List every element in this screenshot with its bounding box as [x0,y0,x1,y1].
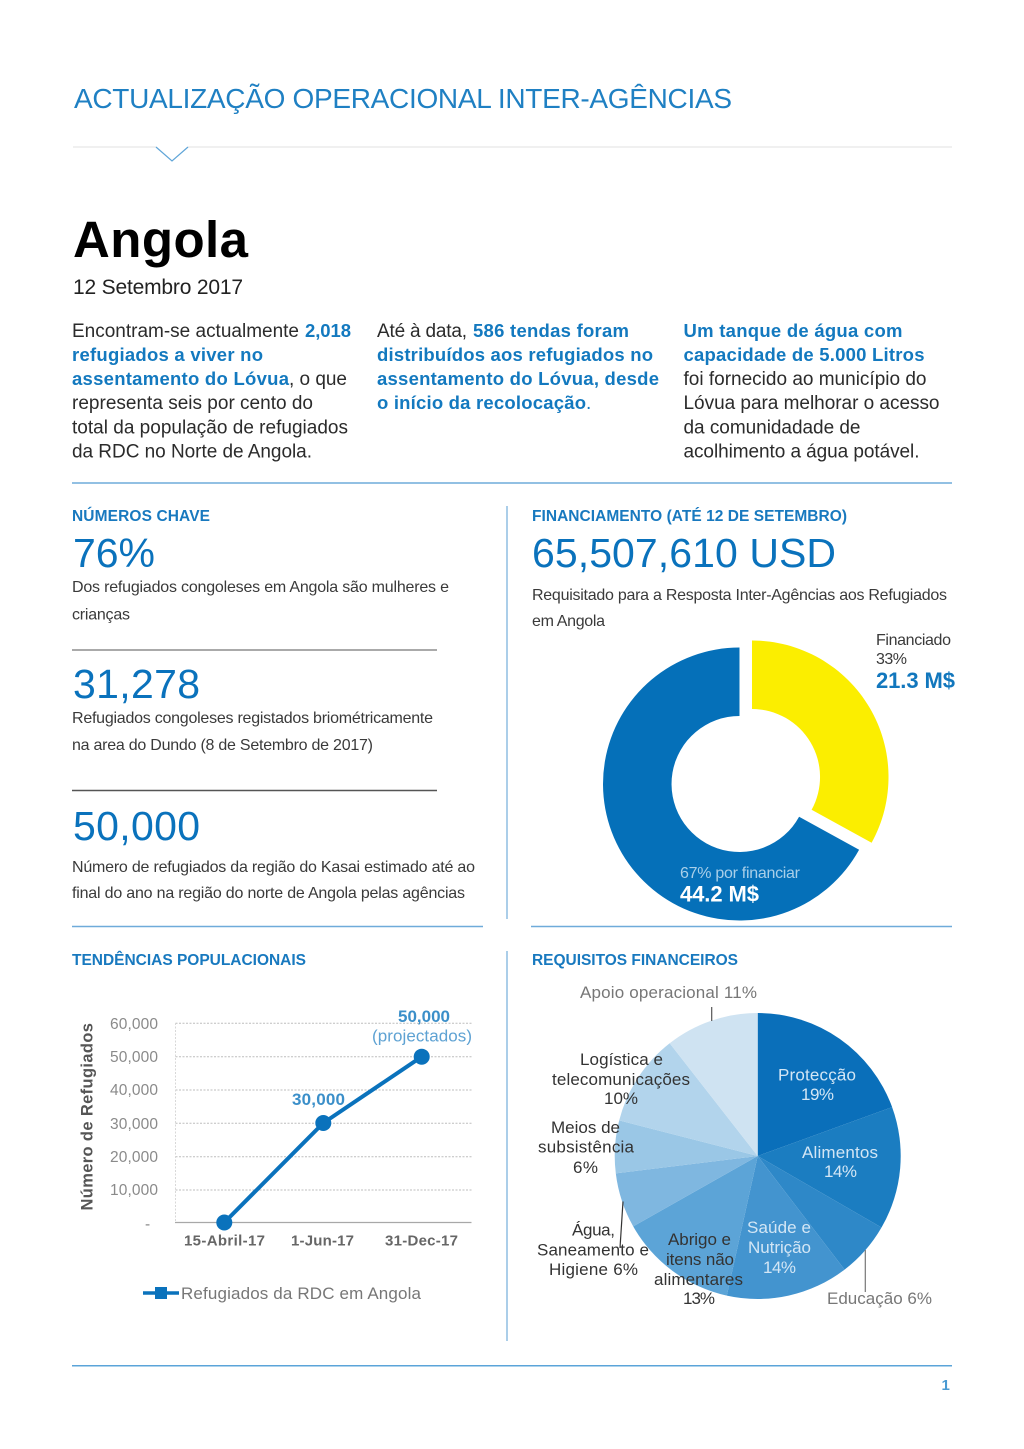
data label: 50,000 projected: 50,000 [398,1007,450,1026]
label: Saúde e Nutrição [747,1218,811,1277]
line chart: refugees over time [78,1007,472,1303]
text block: tents distributed: o início da recolocação [377,392,586,413]
panel: key figures [72,507,475,902]
funding description [532,587,947,630]
panel: population trends [72,951,472,1303]
text block: tents distributed: Até à data, [377,321,467,342]
stat: 76%: crianças [72,606,130,624]
header banner title: ACTUALIZAÇÃO OPERACIONAL INTER-AGÊNCIAS [74,83,732,114]
label: Protecção: Protecção [778,1066,856,1084]
label: Meios de subsistência: Meios de [551,1118,620,1137]
text block: water tank: da comunidadade de [684,418,860,438]
heading: financial requirements: REQUISITOS FINANCEIROS [532,952,738,969]
callout: funded: 33% [876,651,907,668]
callout: funded [876,632,955,693]
text block: tents distributed: 586 tendas foram [473,320,629,341]
callout: unfunded: 44.2 M$ [680,882,759,906]
funding description: em Angola [532,613,605,630]
data label: 30,000: 30,000 [292,1090,345,1109]
y axis labels: 50,000 [110,1049,158,1066]
label: Logística [552,1050,690,1108]
y axis labels: 60,000 [110,1016,158,1033]
donut chart: funded vs unfunded [603,640,889,921]
label: Saúde e Nutrição: 14% [763,1258,796,1277]
callout: unfunded: 67% por financiar [680,865,801,882]
label: Água: Água, [572,1220,615,1240]
stat: 31,278: 31,278 [73,661,200,707]
callout: unfunded [680,865,801,906]
text block: water tank [684,320,940,462]
x axis labels [184,1232,458,1250]
text block: water tank: capacidade de 5.000 Litros [684,344,924,365]
y axis labels [110,1016,158,1233]
text block: water tank: Um tanque de água com [684,320,902,341]
heading: key figures: NÚMEROS CHAVE [72,507,210,525]
text block: refugees in Lóvua: 2,018 [305,320,351,341]
text block: refugees in Lóvua: Encontram-se actualmente [72,321,299,342]
label: Protecção [778,1066,856,1104]
stat: 50,000 [72,803,475,902]
text block: tents distributed: distribuídos aos refugiados no [377,344,653,365]
pie chart: requirements by sector [615,1013,901,1299]
x axis labels: 15-Abril-17 [184,1232,265,1250]
y axis labels: 20,000 [110,1149,158,1166]
text block: refugees in Lóvua: refugiados a viver no [72,344,263,365]
label: Meios de subsistência [538,1118,635,1177]
callout: funded: 21.3 M$ [876,668,955,693]
y axis labels: 40,000 [110,1082,158,1099]
label: Abrigo: itens não [666,1250,734,1269]
x axis labels: 31-Dec-17 [385,1232,458,1250]
label: Água [537,1202,649,1279]
label: Água: Higiene 6% [549,1260,638,1279]
label: Alimentos [802,1143,878,1181]
label: Logística: Logística e [580,1050,663,1069]
text block: water tank: Lóvua para melhorar o acesso [684,393,940,414]
text block: refugees in Lóvua: representa seis por cento do [72,393,313,414]
stat: 76%: 76% [73,530,155,576]
report date: 12 Setembro 2017 [73,276,243,299]
stat: 76% [72,530,449,624]
label: Apoio operacional: Apoio operacional 11% [580,983,757,1002]
stat: 50,000: Número de refugiados da região do Kasai estimado até ao [72,859,475,876]
text block: water tank: foi fornecido ao município do [684,369,926,390]
label: Alimentos: 14% [824,1162,857,1181]
panel: funding [532,508,955,921]
y axis title: Número de Refugiados [78,1023,96,1210]
x axis labels: 1-Jun-17 [291,1232,354,1250]
label: Saúde e Nutrição: Saúde e [747,1218,811,1237]
text block: tents distributed: assentamento do Lóvua, desde [377,368,659,389]
stat: 50,000: final do ano na região do norte de Angola pelas agências [72,885,465,902]
label: Educação [827,1250,932,1308]
text block: refugees in Lóvua: , o que [289,369,347,390]
label: Abrigo: Abrigo e [668,1230,731,1249]
text block: refugees in Lóvua: da RDC no Norte de Angola. [72,442,312,462]
stat: 31,278 [72,661,433,754]
stat: total requested: 65,507,610 USD [532,530,836,576]
label: Saúde e Nutrição: Nutrição [748,1238,811,1257]
y axis labels: 10,000 [110,1182,158,1199]
label: Abrigo: alimentares [654,1270,743,1289]
text block: refugees in Lóvua [72,320,351,462]
label: Meios de subsistência: subsistência [538,1138,635,1156]
data label: 50,000 projected [372,1007,472,1046]
data label: 50,000 projected: (projectados) [372,1026,472,1046]
callout: funded: Financiado [876,632,951,649]
text block: refugees in Lóvua: total da população de refugiados [72,418,348,438]
text block: tents distributed: . [586,393,591,414]
label: Abrigo: 13% [683,1289,715,1308]
label: Protecção: 19% [801,1085,834,1104]
y axis labels: 30,000 [110,1116,158,1133]
label: Meios de subsistência: 6% [573,1158,598,1177]
label: Alimentos: Alimentos [802,1143,878,1162]
funding description: Requisitado para a Resposta Inter-Agências aos Refugiados [532,587,947,604]
data line [216,1049,430,1230]
panel: financial requirements [532,952,932,1308]
label: Educação: Educação 6% [827,1289,932,1308]
label: Água: Saneamento e [537,1240,649,1260]
label: Abrigo [654,1230,743,1308]
heading: funding: FINANCIAMENTO (ATÉ 12 DE SETEMBRO) [532,508,847,525]
legend: Refugiados da RDC em Angola [181,1284,422,1303]
heading: population trends: TENDÊNCIAS POPULACIONAIS [72,951,306,969]
stat: 31,278: na area do Dundo (8 de Setembro de 2017) [72,737,373,754]
text block: refugees in Lóvua: assentamento do Lóvua [72,368,290,389]
stat: 76%: Dos refugiados congoleses em Angola são mulheres e [72,579,449,596]
stat: 50,000: 50,000 [73,803,200,849]
page number: 1 [942,1377,950,1394]
text block: water tank: acolhimento a água potável. [684,442,920,462]
label: Logística: 10% [604,1089,638,1108]
icon: header chevron [156,147,188,161]
country heading: Angola [73,211,249,268]
label: Logística: telecomunicações [552,1070,690,1089]
stat: 31,278: Refugiados congoleses registados briométricamente [72,710,433,727]
y axis labels: - [145,1216,150,1233]
text block: tents distributed [377,320,659,414]
